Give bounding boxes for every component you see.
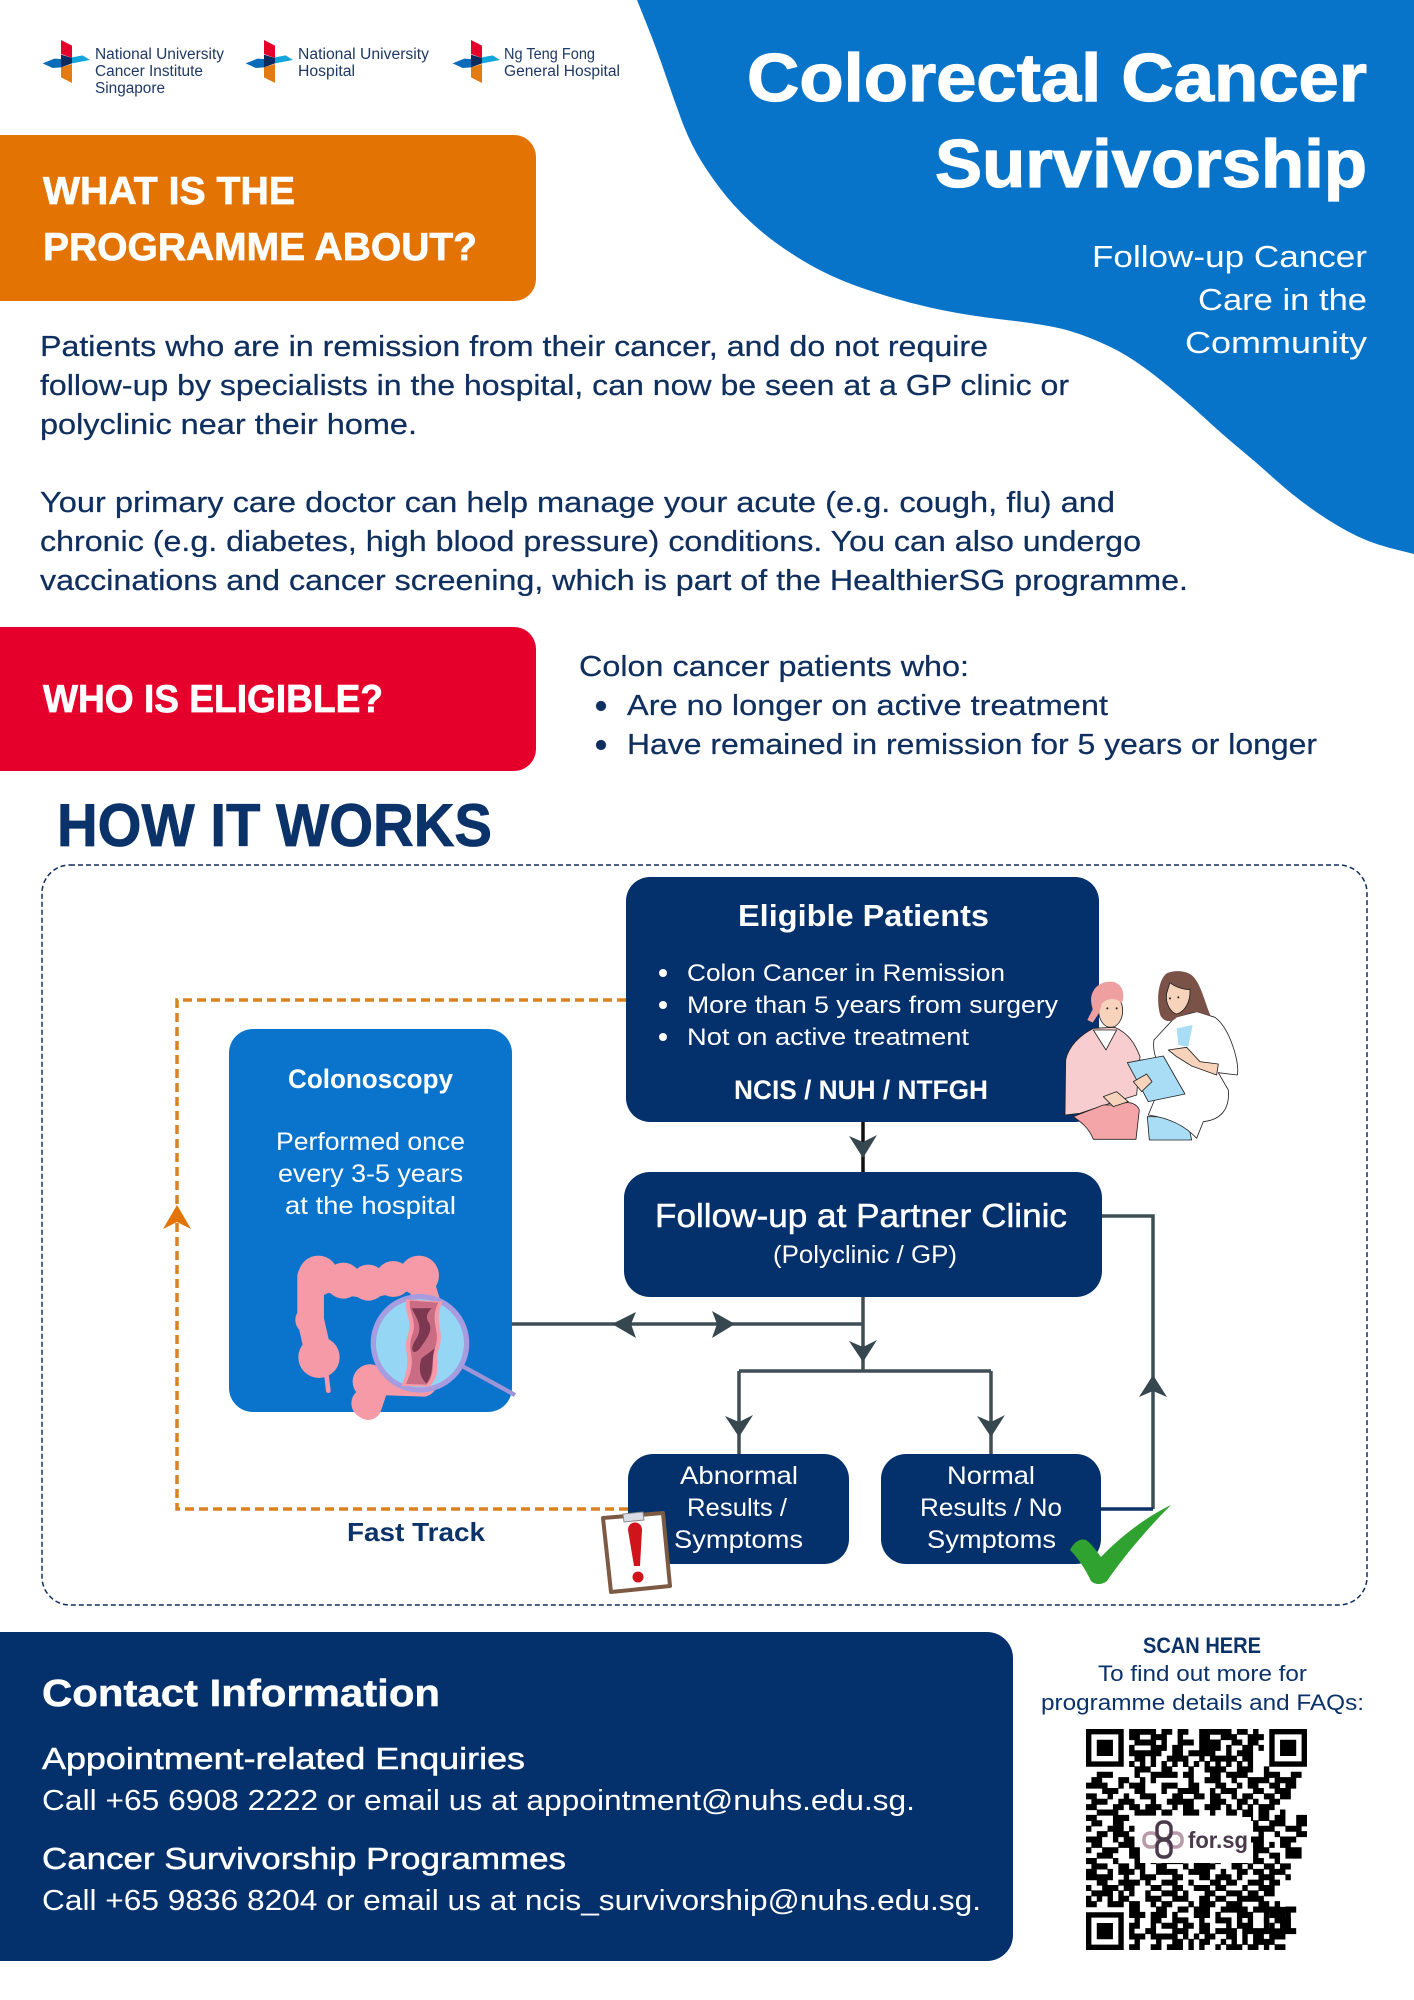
icon: green check mark [1070,1505,1171,1584]
panel: eligible patients: Not on active treatment [687,1024,969,1051]
heading: how it works: HOW IT WORKS [57,792,492,859]
blue wave header panel [637,0,1414,554]
panel: what is the programme about heading: PROGRAMME ABOUT? [43,226,477,269]
text block: programme description: vaccinations and cancer screening, which is part of the HealthierSG programme. [40,565,1188,597]
panel: eligible patients: Colon Cancer in Remission [687,960,1005,987]
panel: abnormal results: Abnormal [680,1462,798,1490]
arrow: normal results loop back to follow-up [1101,1216,1167,1509]
icon: colon with magnifier [295,1256,515,1419]
panel: eligible patients: NCIS / NUH / NTFGH [734,1075,988,1105]
logo: National University Hospital [246,40,429,83]
logo: National University Hospital: National University [298,46,429,63]
arrow: eligible patients to follow-up [849,1122,877,1172]
logos row [43,40,620,97]
panel: contact information [0,1632,1013,1961]
title: Survivorship [935,126,1367,202]
panel: colonoscopy: Performed once [276,1128,465,1156]
panel: normal results: Results / No [920,1494,1062,1522]
panel: eligible patients: More than 5 years from surgery [687,992,1059,1019]
icon: clipboard with exclamation [603,1512,670,1592]
subtitle: Follow-up Cancer [1092,239,1367,274]
panel: colonoscopy: every 3-5 years [278,1160,463,1188]
text block: scan here: To find out more for [1098,1661,1307,1686]
text block: programme description: Your primary care doctor can help manage your acute (e.g. cough, flu) and [40,487,1115,519]
icon: patient and doctor illustration [1065,971,1238,1140]
QR code [1086,1729,1307,1950]
QR centre logo [1140,1817,1251,1863]
logo: National University Cancer Institute Singapore [43,40,224,97]
panel: normal results [881,1454,1101,1564]
arrows: follow-up branches [512,1297,1005,1454]
logo: Ng Teng Fong General Hospital: Ng Teng Fong [504,46,595,63]
panel: abnormal results: Symptoms [674,1526,803,1554]
panel: contact information: Call +65 6908 2222 or email us at appointment@nuhs.edu.sg. [42,1785,915,1817]
panel: follow-up at partner clinic [624,1172,1102,1297]
panel: colonoscopy: at the hospital [285,1192,456,1220]
logo: National University Cancer Institute Singapore: Cancer Institute [95,63,203,80]
panel: what is the programme about heading: WHAT IS THE [43,170,295,213]
logo: Ng Teng Fong General Hospital: General Hospital [504,63,620,80]
logo: Ng Teng Fong General Hospital [453,40,620,83]
text block: programme description: follow-up by specialists in the hospital, can now be seen at a GP clinic or [40,370,1069,402]
text block: eligibility criteria: Are no longer on active treatment [627,690,1108,722]
panel: what is the programme about heading [0,135,536,301]
text block: eligibility criteria: Have remained in remission for 5 years or longer [627,729,1317,761]
panel: normal results: Symptoms [927,1526,1056,1554]
panel: abnormal results [628,1454,849,1564]
flowchart panel border [42,865,1367,1605]
arrow: fast track dashed loop [163,1000,628,1509]
panel: contact information: Appointment-related Enquiries [42,1741,525,1776]
text block: programme description: Patients who are in remission from their cancer, and do not require [40,331,988,363]
subtitle: Community [1185,325,1368,360]
panel: eligible patients [626,877,1099,1122]
subtitle: Care in the [1198,282,1367,317]
text block: scan here: programme details and FAQs: [1041,1690,1364,1715]
panel: contact information: Cancer Survivorship Programmes [42,1841,566,1876]
text block: programme description: polyclinic near their home. [40,409,417,441]
panel: who is eligible heading [0,627,536,771]
logo: National University Cancer Institute Singapore: Singapore [95,80,165,97]
QR centre logo: for.sg [1188,1827,1248,1853]
title: Colorectal Cancer [747,40,1367,116]
title [747,40,1367,202]
subtitle [1092,239,1368,360]
text block: scan here: SCAN HERE [1143,1633,1261,1658]
panel: eligible patients: Eligible Patients [738,898,989,933]
label: fast track: Fast Track [347,1517,486,1547]
text block: eligibility criteria: Colon cancer patients who: [579,651,969,683]
text block: scan here [1041,1633,1364,1715]
panel: who is eligible heading: WHO IS ELIGIBLE? [43,678,383,721]
panel: colonoscopy: Colonoscopy [288,1064,453,1094]
panel: follow-up at partner clinic: Follow-up at Partner Clinic [655,1197,1067,1234]
text block: eligibility criteria [579,651,1317,761]
panel: abnormal results: Results / [687,1494,787,1522]
text block: programme description: chronic (e.g. diabetes, high blood pressure) conditions. You can also undergo [40,526,1141,558]
panel: contact information: Contact Information [42,1673,440,1715]
panel: normal results: Normal [947,1462,1035,1490]
logo: National University Cancer Institute Singapore: National University [95,46,224,63]
logo: National University Hospital: Hospital [298,63,355,80]
panel: contact information: Call +65 9836 8204 or email us at ncis_survivorship@nuhs.edu.sg. [42,1885,981,1917]
panel: follow-up at partner clinic: (Polyclinic / GP) [773,1241,957,1269]
text block: programme description [40,331,1188,597]
panel: colonoscopy [229,1029,512,1412]
